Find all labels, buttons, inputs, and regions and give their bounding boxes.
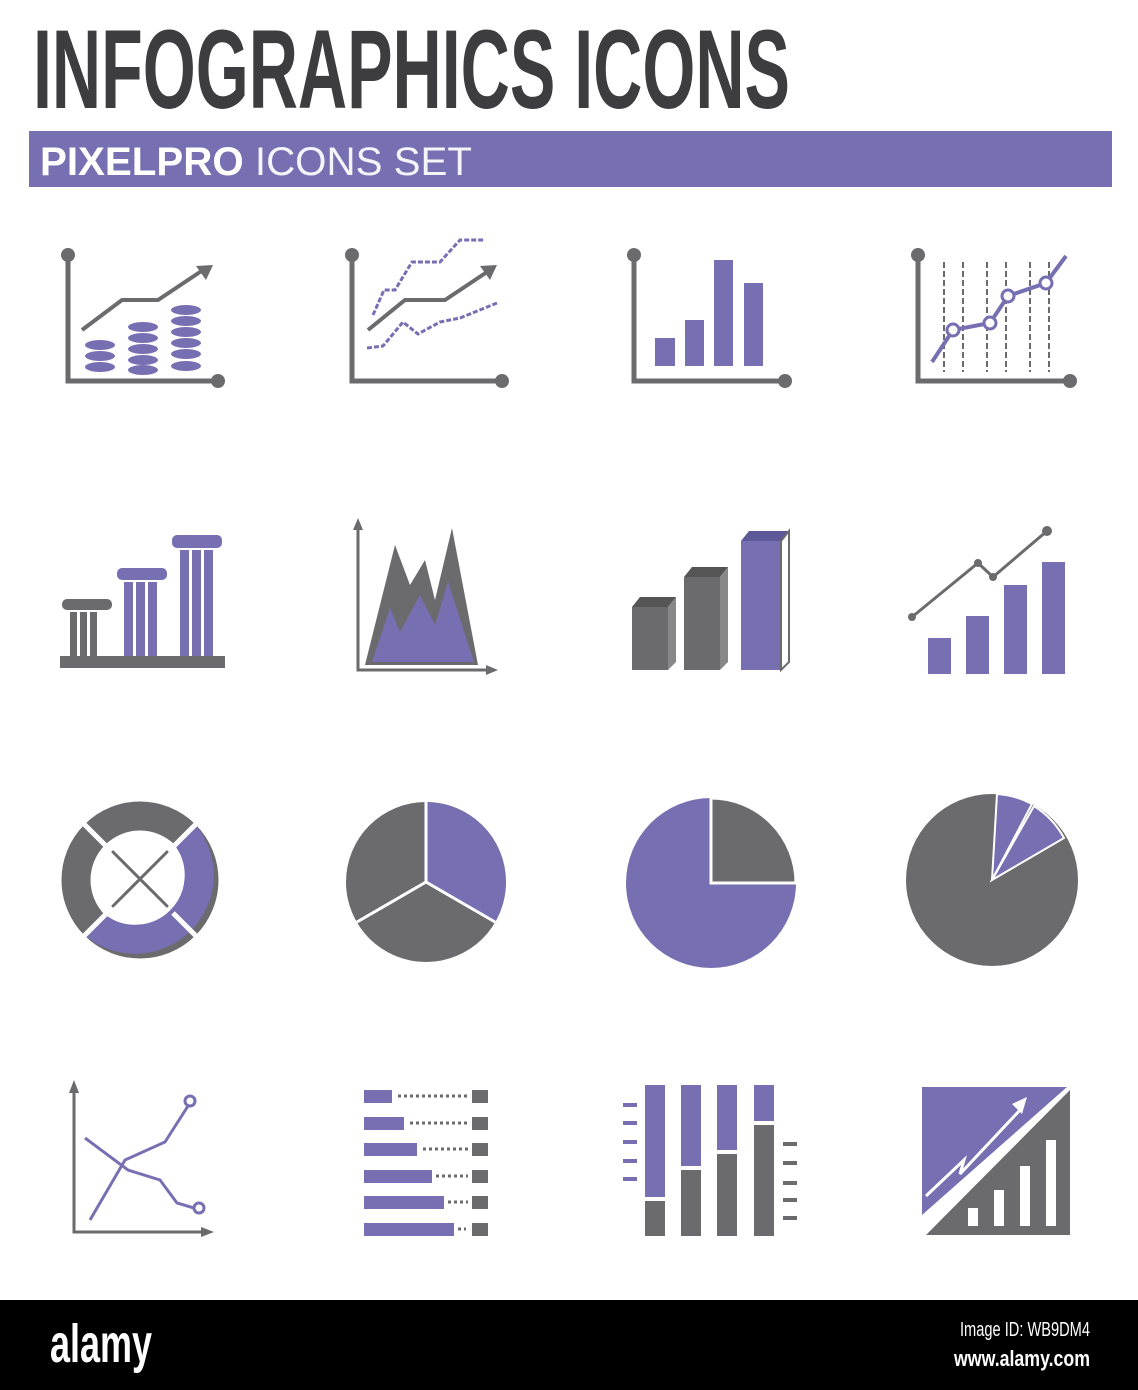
banner: PIXELPRO ICONS SET [40, 140, 472, 184]
icon: crossing line chart [69, 1080, 214, 1237]
footer: Image ID: WB9DM4 [960, 1319, 1090, 1341]
icon: stacked columns [623, 1085, 797, 1236]
icon: bars with trend line [908, 526, 1065, 674]
footer [0, 1300, 1138, 1390]
banner [29, 131, 1112, 187]
icon: pie with wedges [906, 794, 1078, 966]
icon: horizontal bars list [364, 1090, 488, 1236]
footer: www.alamy.com [953, 1346, 1090, 1371]
icon: pie three slices [346, 802, 506, 962]
icon: pie three quarters [626, 798, 796, 968]
icon: line chart with coins [61, 248, 225, 388]
icon: mountain area chart [353, 518, 498, 675]
icon: 3d bars [632, 531, 789, 670]
icon: donut chart [76, 816, 204, 944]
icon: bar chart [627, 248, 792, 388]
footer: alamy [50, 1314, 152, 1374]
icon: trend with range lines [345, 240, 509, 388]
icon: dotted line chart [911, 248, 1077, 388]
icon: growth square [922, 1087, 1070, 1235]
icon: columns podium [60, 535, 225, 668]
